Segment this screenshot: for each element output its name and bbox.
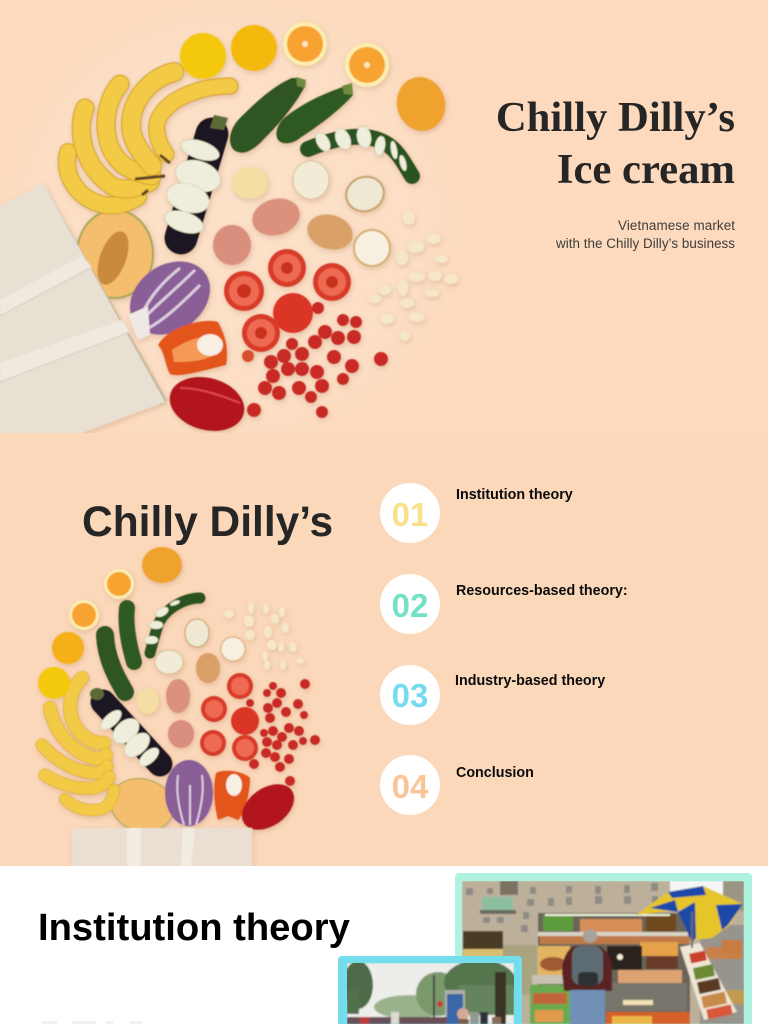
- panel: contents slide: [0, 433, 768, 868]
- bananas: [42, 678, 114, 810]
- title: [496, 94, 735, 193]
- canvas tote bag: [0, 183, 167, 433]
- canvas tote bag: [72, 828, 252, 868]
- oranges: [180, 22, 389, 87]
- oranges: [38, 547, 182, 699]
- red cabbage: [128, 260, 213, 343]
- eggplant slices: [90, 688, 162, 769]
- red bell pepper: [168, 376, 247, 433]
- melon: [111, 777, 174, 828]
- list item 04: 04: [392, 768, 429, 805]
- orange bell pepper: [214, 771, 250, 820]
- zucchini: [105, 598, 200, 692]
- list item 03: 03: [392, 677, 428, 714]
- title: Chilly Dilly’s: [496, 94, 735, 141]
- photo frame: street food cart: [455, 873, 752, 1024]
- list item 03: [380, 665, 605, 725]
- panel: institution theory slide: [40, 873, 752, 1024]
- cherry tomatoes: [246, 679, 320, 786]
- photo: tree-lined street with visitors: [343, 960, 516, 1024]
- list item 02: Resources-based theory:: [456, 583, 628, 599]
- list item 01: [380, 483, 573, 543]
- potatoes and onions: [137, 619, 245, 748]
- tomatoes: [200, 673, 259, 761]
- section heading: Institution theory: [38, 906, 351, 949]
- list item 02: 02: [392, 587, 428, 624]
- cherry tomatoes: [242, 302, 388, 418]
- illustration: produce spilling from a tote bag: [0, 22, 458, 439]
- subtitle: Vietnamese market: [618, 218, 735, 233]
- list item 02: [380, 574, 628, 634]
- illustration: produce above a tote bag: [38, 547, 320, 868]
- cut-off body text: [41, 1021, 142, 1024]
- red cabbage: [165, 760, 213, 826]
- potatoes and onions: [213, 161, 390, 266]
- list item 01: Institution theory: [456, 487, 573, 503]
- heading: Chilly Dilly’s: [82, 499, 333, 546]
- title: Ice cream: [557, 146, 735, 193]
- eggplant slices: [162, 115, 228, 238]
- zucchini slices: [144, 599, 180, 644]
- list item 04: Conclusion: [456, 765, 534, 781]
- garlic cloves: [224, 602, 304, 670]
- subtitle: [555, 218, 735, 251]
- photo: street food cart and customer: [462, 881, 744, 1024]
- bananas: [67, 72, 230, 206]
- photo frame: Hanoi pedestrian street: [338, 956, 522, 1024]
- red bell pepper: [241, 783, 297, 834]
- subtitle: with the Chilly Dilly’s business: [555, 236, 735, 251]
- zucchini: [230, 77, 412, 176]
- tomatoes: [224, 249, 351, 352]
- panel: cover slide: [0, 0, 768, 460]
- list item 04: [380, 755, 534, 815]
- orange bell pepper: [158, 321, 227, 375]
- garlic cloves: [369, 211, 458, 341]
- zucchini slices: [313, 125, 408, 172]
- list item 03: Industry-based theory: [455, 673, 605, 689]
- melon: [76, 209, 154, 299]
- mango: [396, 76, 448, 135]
- list item 01: 01: [392, 496, 428, 533]
